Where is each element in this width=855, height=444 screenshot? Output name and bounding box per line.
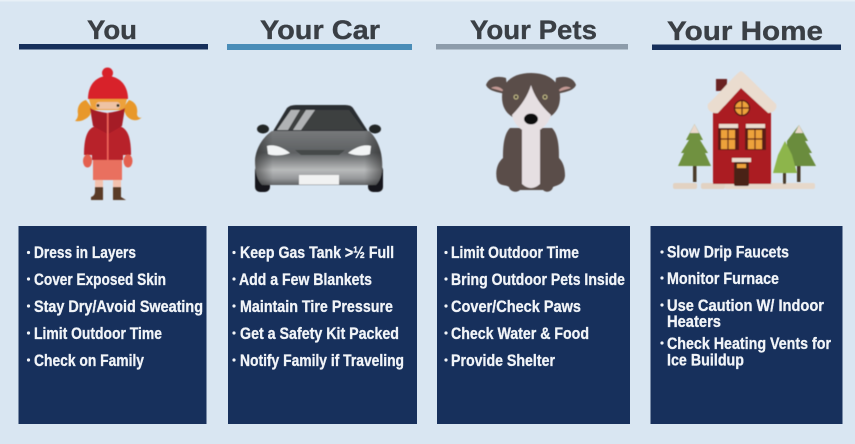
- panel: Your Pets tips: [437, 226, 630, 424]
- heading: Your Home: Your Home: [667, 16, 823, 46]
- heading: You: You: [87, 15, 137, 45]
- heading underline: Your Pets: [436, 44, 628, 50]
- column: Your Car: [227, 15, 417, 424]
- column: Your Home: [650, 16, 842, 424]
- panel: Your Pets tips: Limit Outdoor Time: [451, 244, 579, 262]
- panel: Your Pets tips: Provide Shelter: [451, 352, 555, 370]
- panel: Your Home tips: [650, 226, 842, 424]
- column: You: [18, 15, 208, 424]
- heading underline: You: [19, 44, 208, 50]
- icon: child in winter coat: [75, 68, 142, 200]
- icon: car: [255, 105, 383, 192]
- icon: snowy house with trees: [673, 71, 816, 189]
- heading: Your Car: Your Car: [260, 15, 381, 45]
- panel: Your Home tips: Heaters: [667, 313, 721, 331]
- panel: You tips: Limit Outdoor Time: [34, 325, 162, 343]
- panel: Your Car tips: Maintain Tire Pressure: [240, 298, 393, 316]
- heading underline: Your Car: [227, 44, 412, 50]
- panel: Your Pets tips: Cover/Check Paws: [451, 298, 581, 316]
- panel: Your Home tips: Ice Buildup: [667, 352, 744, 370]
- panel: Your Car tips: Add a Few Blankets: [239, 271, 372, 289]
- panel: Your Pets tips: Check Water & Food: [451, 325, 589, 343]
- icon: dog: [486, 73, 576, 192]
- panel: Your Car tips: Get a Safety Kit Packed: [240, 325, 399, 343]
- panel: You tips: Stay Dry/Avoid Sweating: [34, 298, 203, 316]
- heading underline: Your Home: [652, 44, 841, 50]
- panel: You tips: [18, 226, 206, 424]
- panel: You tips: Check on Family: [34, 352, 145, 370]
- column: Your Pets: [436, 15, 630, 424]
- panel: Your Pets tips: Bring Outdoor Pets Inside: [451, 271, 625, 289]
- panel: Your Car tips: Notify Family if Traveling: [240, 352, 404, 370]
- panel: You tips: Cover Exposed Skin: [34, 271, 166, 289]
- heading: Your Pets: Your Pets: [470, 15, 597, 45]
- panel: Your Home tips: Monitor Furnace: [667, 270, 779, 288]
- panel: Your Home tips: Use Caution W/ Indoor: [667, 297, 825, 315]
- panel: Your Home tips: Check Heating Vents for: [667, 335, 831, 353]
- panel: You tips: Dress in Layers: [34, 244, 136, 262]
- panel: Your Car tips: Keep Gas Tank >½ Full: [240, 244, 394, 262]
- panel: Your Home tips: Slow Drip Faucets: [667, 244, 789, 262]
- panel: Your Car tips: [228, 226, 417, 424]
